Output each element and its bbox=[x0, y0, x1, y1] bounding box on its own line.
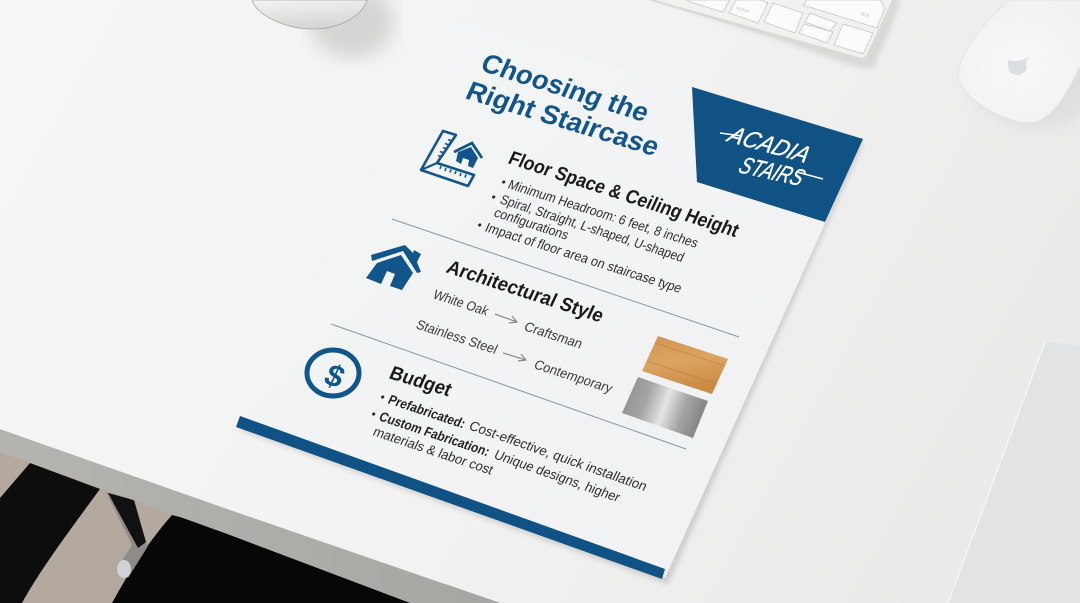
heading: budget: Budget bbox=[386, 362, 456, 401]
icon: ruler and house bbox=[421, 131, 482, 186]
budget bullets: • bbox=[378, 390, 388, 404]
floor space bullets: configurations bbox=[492, 205, 572, 243]
material to style mapping: Contemporary bbox=[532, 357, 615, 396]
icon: house bbox=[366, 245, 421, 290]
floor and chairs under desk bbox=[0, 430, 520, 603]
floor space bullets: • bbox=[499, 175, 509, 189]
mug bbox=[252, 0, 367, 29]
mouse shadow bbox=[974, 40, 1080, 128]
section: floor space bbox=[475, 148, 743, 296]
title: Choosing the bbox=[477, 47, 654, 128]
floor space bullets: Spiral, Straight, L-shaped, U-shaped bbox=[498, 192, 687, 265]
keyboard bbox=[648, 0, 897, 64]
second sheet of paper on desk bbox=[948, 342, 1080, 603]
floor space bullets: • bbox=[475, 218, 485, 232]
material to style mapping: Craftsman bbox=[522, 319, 585, 351]
material to style mapping: White Oak bbox=[431, 287, 491, 318]
budget bullets: Prefabricated: bbox=[386, 392, 468, 431]
keyboard: shift bbox=[859, 11, 871, 20]
logo wordmark: STAIRS bbox=[734, 153, 809, 191]
budget bullets bbox=[369, 390, 650, 505]
arrow: white oak to craftsman bbox=[495, 314, 517, 323]
logo panel bbox=[692, 87, 863, 222]
keyboard: option bbox=[735, 5, 750, 15]
bottom band bbox=[236, 416, 665, 579]
floor space bullets: Impact of floor area on staircase type bbox=[483, 220, 684, 296]
budget bullets: Custom Fabrication: bbox=[377, 409, 492, 459]
budget bullets: Unique designs, higher bbox=[492, 447, 623, 505]
floor space bullets bbox=[475, 175, 701, 296]
heading: architectural style: Architectural Style bbox=[443, 257, 607, 327]
icon: dollar circle: $ bbox=[319, 358, 350, 395]
steel swatch bbox=[622, 377, 708, 438]
section: architectural style bbox=[414, 257, 728, 438]
keyboard shadow bbox=[660, 0, 902, 68]
logo wordmark: ACADIA bbox=[721, 122, 816, 168]
heading: floor space: Floor Space & Ceiling Height bbox=[505, 148, 743, 242]
wood swatch bbox=[642, 336, 728, 394]
section: budget bbox=[369, 362, 650, 505]
material to style mapping: Stainless Steel bbox=[414, 317, 500, 357]
desk front edge bbox=[0, 429, 500, 603]
title: Right Staircase bbox=[462, 75, 665, 162]
logo wordmark bbox=[720, 122, 823, 191]
icon: dollar circle bbox=[307, 350, 359, 396]
material to style mapping bbox=[414, 287, 615, 396]
mouse bbox=[958, 0, 1080, 123]
mug shadow bbox=[310, 0, 394, 58]
paper shadow bbox=[240, 142, 863, 584]
budget bullets: Cost-effective, quick installation bbox=[467, 418, 650, 494]
budget bullets: materials & labor cost bbox=[371, 424, 496, 477]
flyer sheet bbox=[236, 20, 863, 579]
floor space bullets: • bbox=[489, 190, 499, 204]
arrow: stainless steel to contemporary bbox=[503, 353, 526, 361]
floor space bullets: Minimum Headroom: 6 feet, 8 inches bbox=[506, 177, 701, 251]
budget bullets: • bbox=[369, 407, 379, 421]
